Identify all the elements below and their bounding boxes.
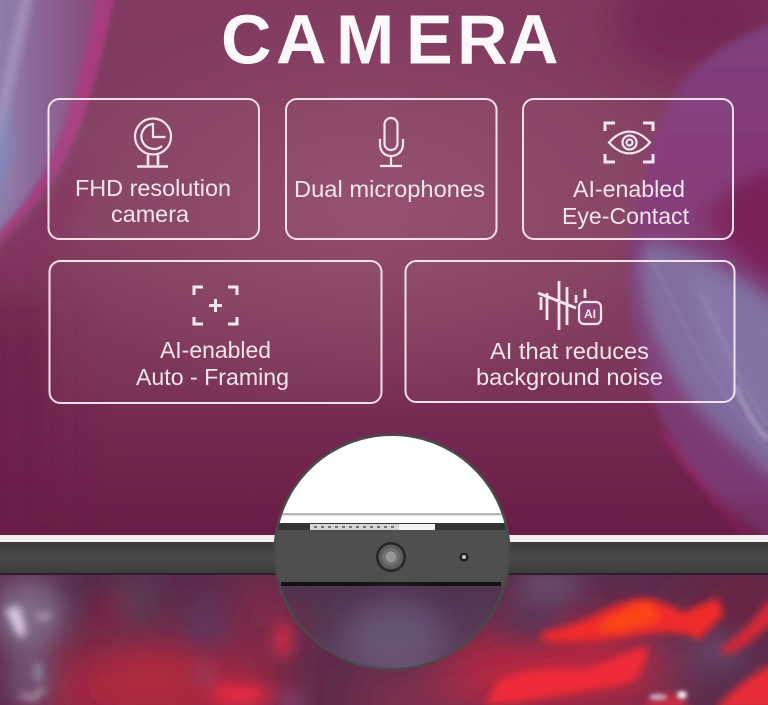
label: Auto - Framing (136, 364, 289, 390)
hinge strip with microphone grille (270, 523, 520, 530)
camera lens (376, 542, 406, 572)
label (75, 175, 231, 227)
label: AI that reduces (490, 338, 649, 364)
label: AI-enabled (160, 337, 271, 363)
label: FHD resolution (75, 175, 231, 201)
purple wallpaper background (0, 0, 768, 560)
label (136, 337, 289, 390)
label (476, 338, 663, 390)
indicator light (460, 552, 468, 562)
icon: sound wave with AI badge: AI (584, 307, 596, 321)
card: AI-enabled Auto-Framing (50, 261, 382, 403)
laptop bezel bar (0, 535, 768, 575)
label: background noise (476, 364, 663, 390)
white lid (280, 436, 504, 523)
icon: webcam (135, 118, 171, 166)
dark bezel (270, 530, 520, 584)
label: camera (111, 201, 189, 227)
red cloud upper (541, 598, 724, 642)
magnifier: webcam close-up (274, 434, 510, 670)
label: Eye-Contact (562, 203, 690, 229)
laptop screen wallpaper (0, 570, 768, 705)
label: AI-enabled (573, 176, 685, 202)
card: FHD resolution camera (48, 99, 259, 239)
card: AI that reduces background noise (406, 261, 734, 402)
icon: framing plus (194, 287, 237, 324)
icon: eye in frame (605, 123, 653, 162)
card: Dual microphones (286, 99, 496, 239)
zoomed screen (281, 586, 503, 668)
label: Dual microphones (294, 176, 485, 202)
icon: microphone (380, 118, 403, 166)
right swirl (628, 18, 768, 550)
card: AI-enabled Eye-Contact (523, 99, 733, 239)
title: CAMERA (221, 0, 559, 78)
icon: sound wave with AI badge (538, 281, 601, 330)
red cloud lower (485, 646, 648, 705)
label (562, 176, 690, 229)
left swirl (0, 0, 115, 260)
